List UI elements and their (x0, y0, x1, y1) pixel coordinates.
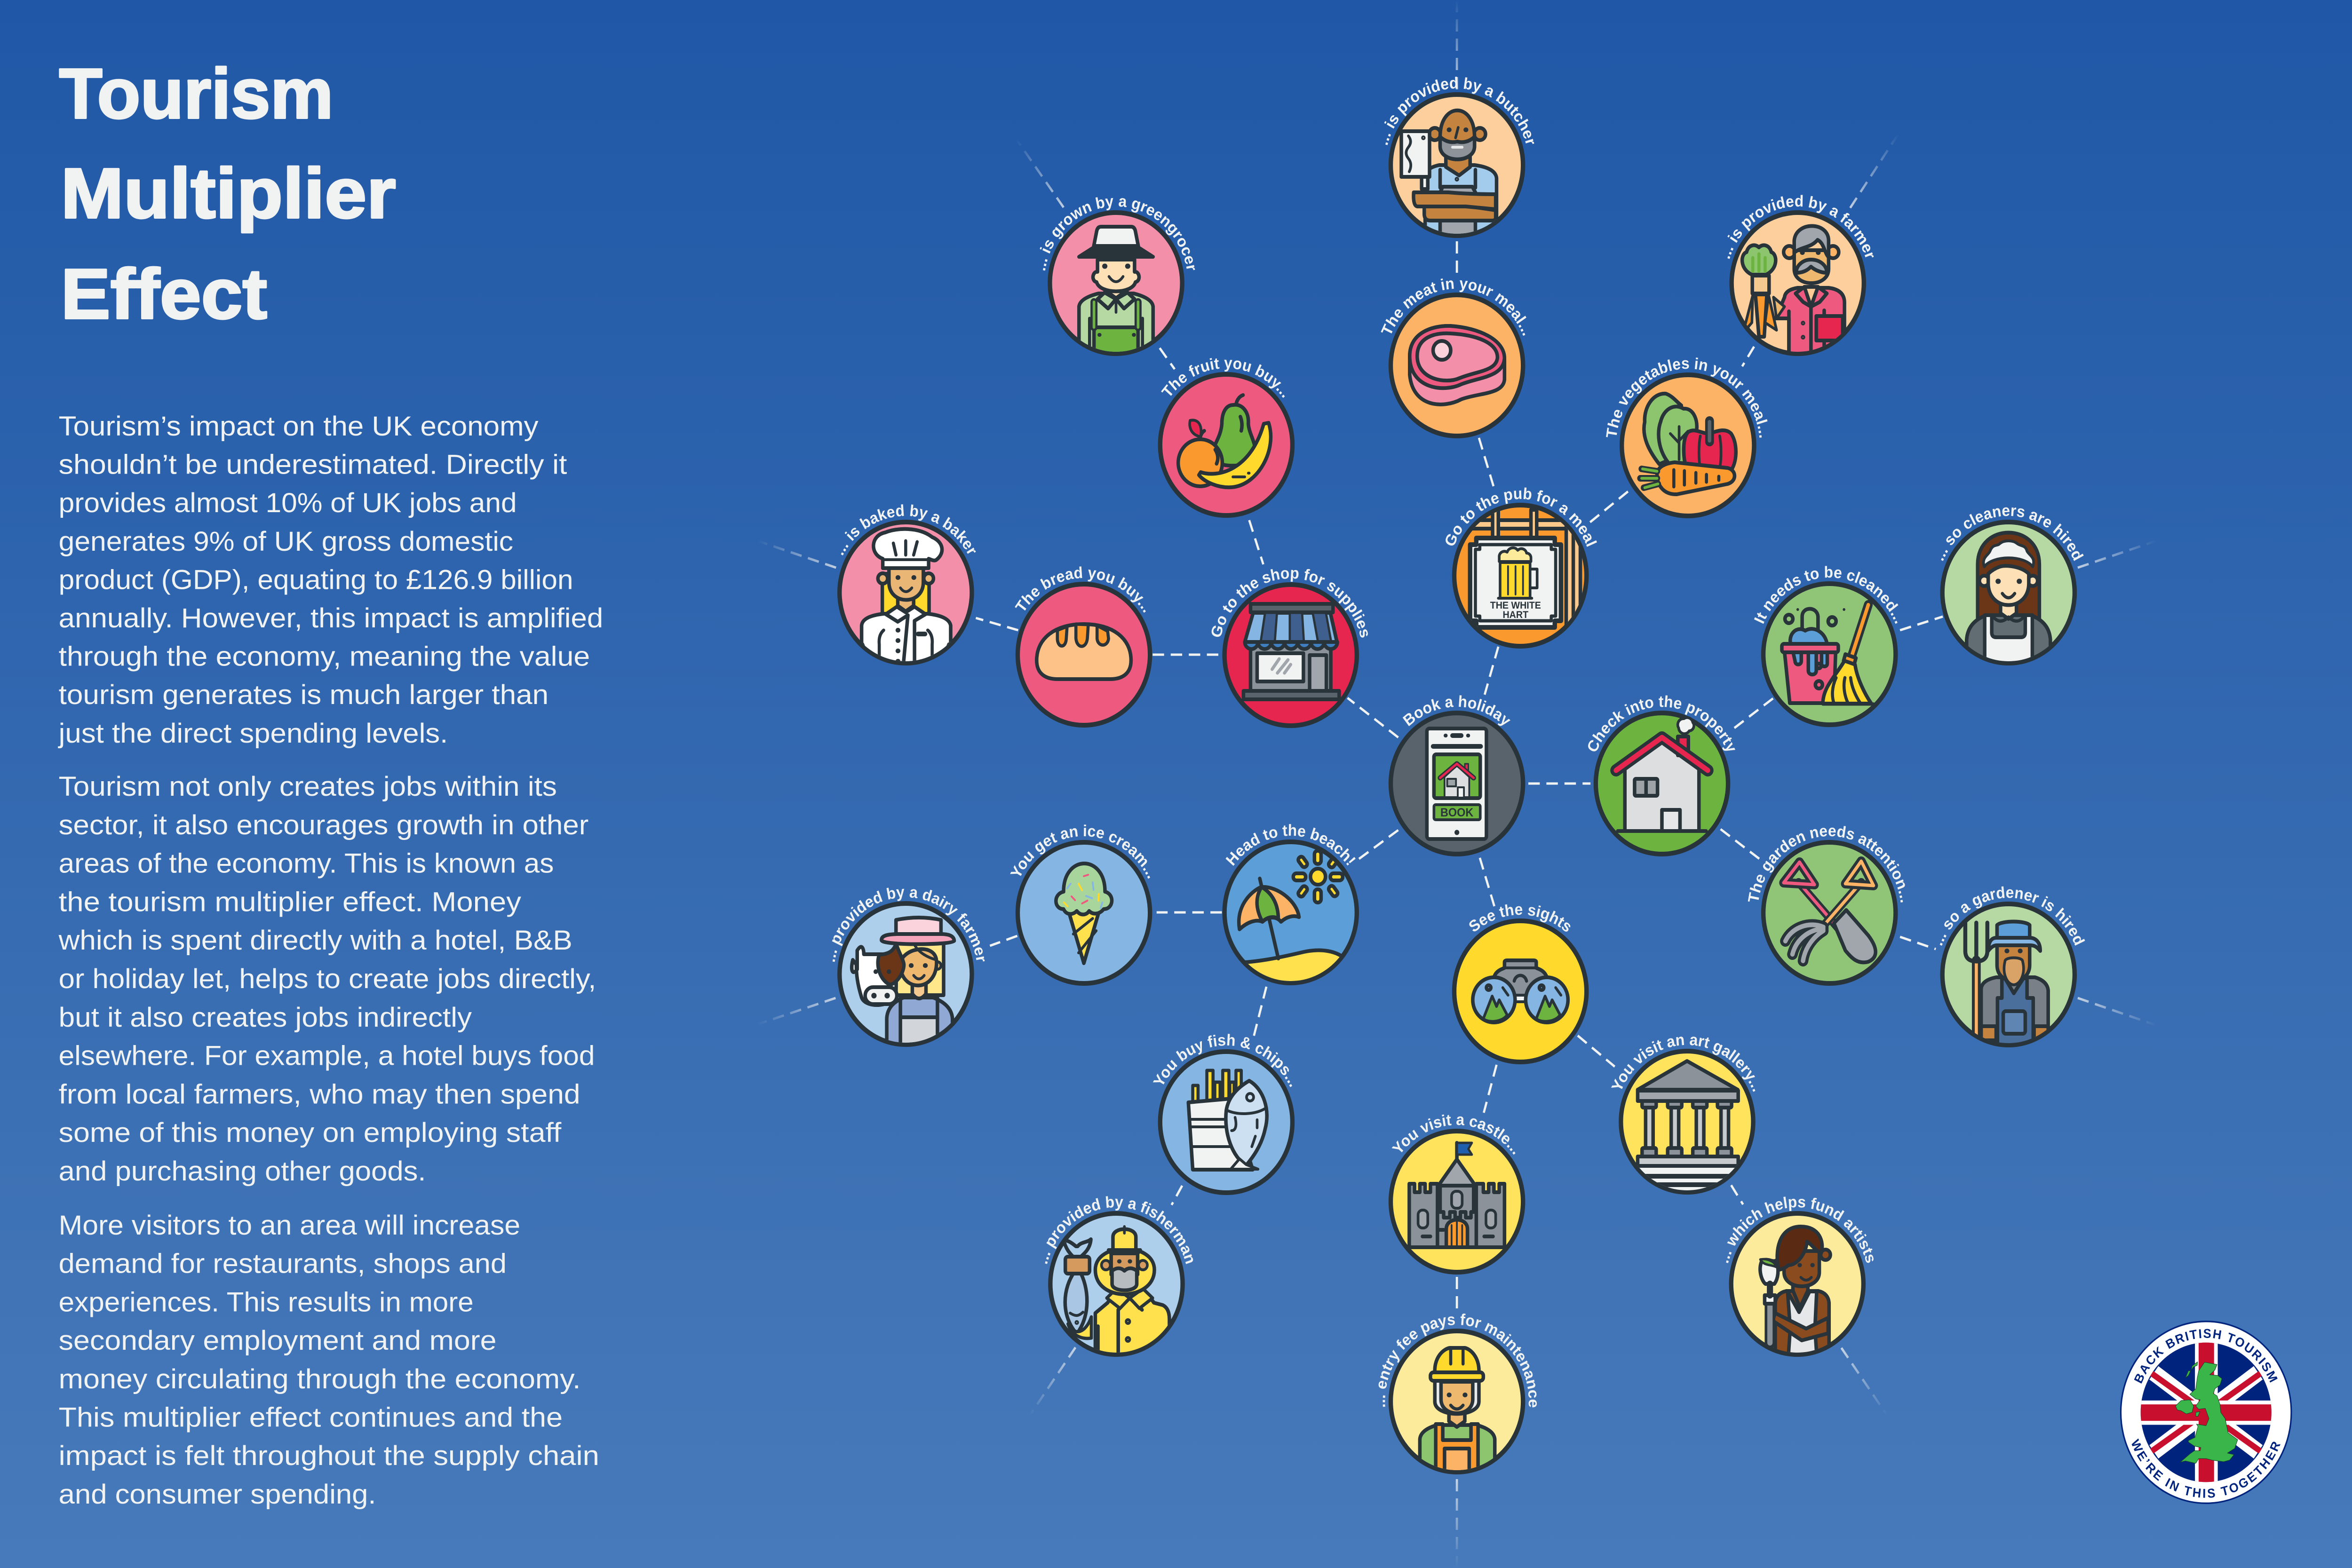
icon: gardener (1965, 922, 2048, 1045)
icon: beach umbrella and sun (1224, 851, 1346, 988)
node: is provided by a butcher (1374, 74, 1540, 236)
icon: fisherman (1064, 1227, 1169, 1354)
text block: paragraph 2: and purchasing other goods. (59, 1156, 426, 1186)
label: See the sights (1465, 900, 1575, 936)
text block: paragraph 3: demand for restaurants, shops and (59, 1248, 507, 1279)
icon: artist (1760, 1227, 1830, 1354)
icon: ice cream (1056, 863, 1112, 963)
label: You visit a castle... (1389, 1110, 1525, 1158)
text block: paragraph 1 (57, 411, 603, 748)
node: so a gardener is hired (1929, 883, 2088, 1045)
node: entry fee pays for maintenance (1371, 1310, 1542, 1472)
icon: fruit (1178, 395, 1271, 487)
node: The fruit you buy (1159, 354, 1295, 515)
label: ... provided by a dairy farmer (821, 883, 990, 964)
text block: paragraph 2: elsewhere. For example, a hotel buys food (59, 1040, 595, 1071)
icon: castle (1407, 1143, 1506, 1247)
icon: garden tools (1784, 861, 1875, 962)
label: It needs to be cleaned... (1751, 563, 1908, 626)
text block: paragraph 2: from local farmers, who may then spend (59, 1079, 580, 1109)
text block: paragraph 1: just the direct spending levels. (57, 718, 448, 748)
title: Multiplier (61, 154, 396, 233)
node: You visit an art gallery (1608, 1030, 1766, 1193)
label: Check into the property (1583, 692, 1740, 755)
text block: paragraph 3 (59, 1210, 599, 1509)
icon: butcher (1401, 111, 1496, 236)
badge text top: BACK BRITISH TOURISM (2131, 1326, 2281, 1386)
icon: steak (1410, 326, 1504, 404)
icon: bucket and broom (1782, 605, 1874, 704)
label: Head to the beach! (1223, 821, 1359, 869)
label: ... is provided by a butcher (1374, 74, 1540, 147)
badge text bottom: WE’RE IN THIS TOGETHER (2128, 1437, 2284, 1501)
text block: paragraph 3: money circulating through the economy. (59, 1363, 581, 1394)
icon: greengrocer (1079, 227, 1153, 354)
node: It needs to be cleaned (1751, 563, 1908, 725)
node: The meat in your meal (1378, 274, 1536, 436)
title (59, 55, 396, 334)
icon: bread (1037, 624, 1131, 679)
text block: paragraph 1: Tourism’s impact on the UK economy (59, 411, 539, 441)
icon: fish and chips (1188, 1070, 1267, 1170)
icon: baker (862, 529, 951, 663)
text block: paragraph 1: annually. However, this impact is amplified (59, 602, 603, 633)
label: Go to the shop for supplies (1207, 564, 1374, 640)
union jack flag (2140, 1342, 2272, 1483)
label: You buy fish & chips... (1150, 1031, 1303, 1090)
text block: paragraph 2: sector, it also encourages growth in other (59, 809, 588, 840)
icon: vegetables (1640, 394, 1736, 494)
node: Book a holiday (1391, 692, 1523, 854)
icon: dairy farmer with cow (852, 918, 954, 1045)
icon: phone with booking page (1427, 729, 1486, 839)
node: You buy fish and chips (1150, 1031, 1303, 1193)
icon: shop (1243, 604, 1339, 699)
text block: paragraph 3: secondary employment and more (59, 1325, 496, 1355)
text block: paragraph 1: generates 9% of UK gross domestic (59, 526, 513, 556)
label: Go to the pub for a meal (1441, 484, 1600, 549)
title: Effect (61, 255, 267, 334)
icon: cleaner (1967, 532, 2050, 663)
node: Head to the beach (1223, 821, 1359, 988)
node: so cleaners are hired (1940, 507, 2084, 665)
text block: paragraph 3: More visitors to an area will increase (59, 1210, 520, 1240)
icon: binoculars (1473, 960, 1568, 1022)
node: is grown by a greengrocer (1032, 192, 1200, 354)
icon: pub sign (1468, 508, 1582, 630)
label: ... entry fee pays for maintenance (1371, 1310, 1542, 1409)
node: Go to the pub for a meal (1441, 484, 1600, 646)
node: provided by a dairy farmer (821, 883, 990, 1045)
text block: paragraph 1: provides almost 10% of UK jobs and (59, 488, 517, 518)
text block: paragraph 3: impact is felt throughout the supply chain (59, 1441, 599, 1471)
node: You get an ice cream (1007, 822, 1161, 983)
icon: farmer (1742, 226, 1844, 354)
text block: paragraph 2: but it also creates jobs indirectly (59, 1002, 472, 1032)
text block: paragraph 2: some of this money on employing staff (59, 1117, 562, 1148)
text block: paragraph 2: the tourism multiplier effect. Money (59, 887, 521, 917)
text block: paragraph 1: product (GDP), equating to £126.9 billion (59, 564, 573, 595)
node: is provided by a farmer (1727, 195, 1874, 356)
node: Check into the property (1583, 692, 1740, 854)
logo: Back British Tourism badge (2121, 1322, 2291, 1503)
label: You visit an art gallery... (1608, 1030, 1766, 1094)
text block: paragraph 1: through the economy, meaning the value (59, 641, 590, 672)
node: The garden needs attention (1745, 822, 1915, 983)
dashed connectors between circles (976, 241, 1943, 1309)
icon: pub sign: THE WHITE (1490, 600, 1541, 611)
node: which helps fund artists (1715, 1193, 1880, 1354)
icon: maintenance worker (1420, 1348, 1495, 1472)
text block: paragraph 2: areas of the economy. This is known as (59, 848, 554, 879)
label: ... so a gardener is hired (1929, 883, 2088, 948)
label: ... is provided by a farmer (1716, 192, 1879, 261)
text block: paragraph 1: shouldn’t be underestimated. Directly it (59, 449, 567, 480)
node: is baked by a baker (830, 501, 981, 663)
label: The garden needs attention... (1745, 822, 1915, 904)
icon: phone with booking page: BOOK (1440, 806, 1474, 819)
label: The vegetables in your meal... (1603, 354, 1773, 439)
uk map (2176, 1362, 2238, 1463)
node: Go to the shop for supplies (1207, 564, 1374, 726)
icon: pub sign: HART (1502, 610, 1529, 620)
label: ... is grown by a greengrocer (1032, 192, 1200, 272)
label: The bread you buy... (1012, 563, 1156, 616)
fading outer connectors (757, 0, 2156, 1568)
label: ... provided by a fisherman (1033, 1193, 1199, 1266)
node: See the sights (1454, 900, 1587, 1062)
label: The meat in your meal... (1378, 274, 1536, 338)
node: provided by a fisherman (1033, 1193, 1199, 1354)
label: ... so cleaners are hired (1930, 501, 2087, 563)
icon: house (1616, 718, 1708, 831)
text block: paragraph 3: experiences. This results in more (59, 1287, 474, 1317)
text block: paragraph 3: and consumer spending. (59, 1479, 376, 1509)
text block: paragraph 2 (58, 771, 596, 1186)
label: You get an ice cream... (1007, 822, 1161, 881)
label: Book a holiday (1400, 692, 1514, 730)
label: ... is baked by a baker (830, 501, 981, 558)
label: ... which helps fund artists (1715, 1193, 1880, 1265)
text block: paragraph 2: which is spent directly with a hotel, B&B (58, 925, 572, 956)
node: You visit a castle (1389, 1110, 1525, 1272)
text block: paragraph 1: tourism generates is much larger than (59, 680, 548, 710)
node: The vegetables in your meal (1603, 354, 1773, 516)
node: The bread you buy (1012, 563, 1156, 725)
title: Tourism (59, 55, 334, 134)
text block: paragraph 2: or holiday let, helps to create jobs directly, (59, 963, 596, 994)
icon: gallery building (1621, 1061, 1753, 1193)
text block: paragraph 2: Tourism not only creates jobs within its (59, 771, 557, 801)
label: The fruit you buy... (1159, 354, 1295, 401)
text block: paragraph 3: This multiplier effect continues and the (59, 1402, 563, 1433)
